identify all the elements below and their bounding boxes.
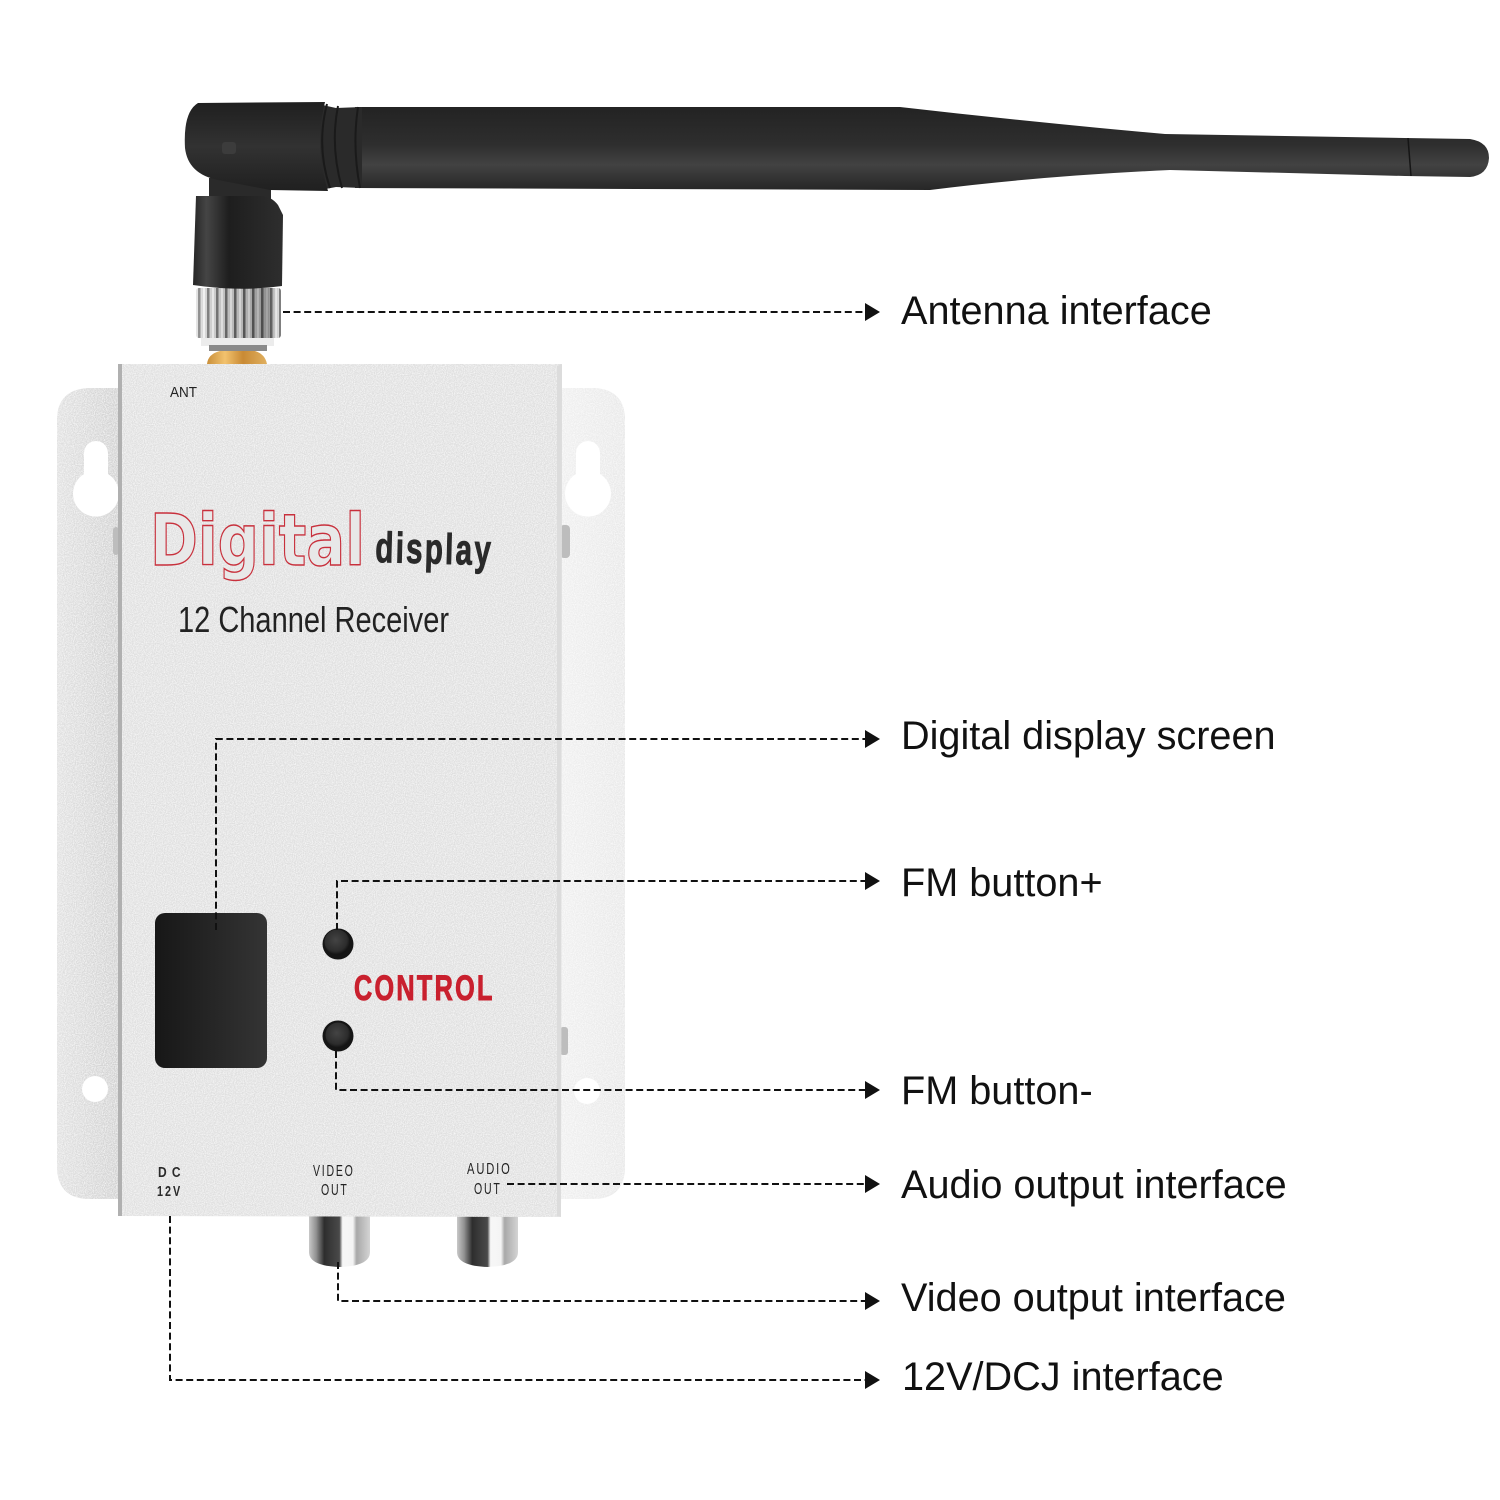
callout: antenna interface [283,289,1212,333]
DC 12V label [157,1164,182,1199]
callout: video output interface: Video output interface [901,1276,1286,1320]
antenna connector: knurled nut [196,288,281,351]
callout: FM button plus [337,861,1103,930]
RCA connector: audio [457,1214,518,1267]
FM button plus [322,928,354,960]
VIDEO OUT label: OUT [321,1181,349,1199]
antenna shaft [355,107,1489,190]
mounting flange [57,388,625,1199]
antenna [185,102,1489,364]
callout: FM button plus: FM button+ [901,861,1103,905]
callout: video output interface [338,1262,1286,1320]
AUDIO OUT label: AUDIO [467,1160,512,1177]
side screws [113,525,570,1055]
callout: 12V/DCJ interface [170,1216,1224,1399]
callout: digital display screen: Digital display screen [901,714,1276,758]
enclosure top [118,364,562,1217]
callout: 12V/DCJ interface: 12V/DCJ interface [902,1355,1224,1399]
DC 12V label: D C [158,1164,182,1180]
RCA connector: video [309,1214,370,1267]
antenna connector: gold pin [207,351,267,364]
callout: audio output interface [507,1163,1287,1207]
enclosure left edge [118,364,122,1216]
callout: FM button minus [336,1051,1093,1113]
ANT label: ANT [170,385,197,401]
FM button minus [322,1020,354,1052]
AUDIO OUT label [467,1160,512,1198]
VIDEO OUT label: VIDEO [313,1162,355,1180]
antenna sleeve [193,196,283,289]
VIDEO OUT label [313,1162,355,1199]
DC 12V label: 12V [157,1182,182,1199]
callout: digital display screen [216,714,1276,930]
display screen [155,913,267,1068]
antenna neck [209,178,271,206]
model line: 12 Channel Receiver [178,599,449,640]
antenna head mark [222,142,236,154]
enclosure right edge [557,364,562,1217]
receiver device [57,364,625,1267]
logo: display: display [375,524,494,574]
callout: FM button minus: FM button- [901,1069,1093,1113]
antenna elbow head [185,102,328,191]
callout: antenna interface: Antenna interface [901,289,1212,333]
antenna tip seam [1408,138,1411,176]
callout: audio output interface: Audio output interface [901,1163,1287,1207]
AUDIO OUT label: OUT [474,1180,502,1198]
antenna hinge ribs [318,104,362,190]
CONTROL label: CONTROL [354,969,495,1008]
logo: Digital: Digital [150,499,365,582]
